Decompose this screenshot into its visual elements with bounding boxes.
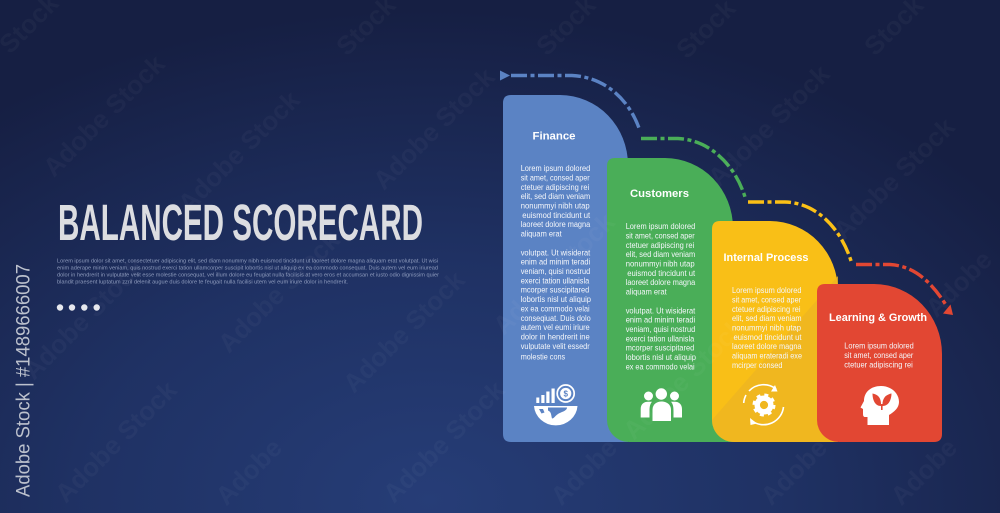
dashed arrow: learning and growth: [856, 264, 953, 315]
customers text: exerci tation ullanisla: [626, 333, 694, 343]
stock id vertical label: Adobe Stock | #1489666007: [14, 264, 34, 497]
dashed arrow: finance: [500, 70, 640, 131]
finance text: mcorper suscipitared: [521, 285, 589, 295]
finance heading: Finance: [532, 130, 576, 142]
stock watermarks: Adobe Stock: [172, 84, 306, 218]
stock watermarks: Adobe: [209, 432, 288, 511]
finance text: sit amet, consed aper: [521, 172, 590, 182]
customers text: ex ea commodo velai: [626, 361, 695, 371]
icon: finance globe with coin and bars: $: [563, 390, 568, 398]
internal process text: elit, sed diam veniam: [732, 313, 802, 323]
finance text: enim ad minim teradi: [521, 257, 590, 267]
customers text: euismod tincidunt ut: [627, 268, 696, 278]
internal process text: aliquam erateradi exe: [732, 350, 802, 360]
customers text: volutpat. Ut wisiderat: [626, 305, 696, 315]
finance text: laoreet dolore magna: [521, 219, 590, 229]
title: BALANCED SCORECARD: [58, 194, 423, 251]
stock watermarks: Adobe: [754, 432, 833, 511]
finance text: exerci tation ullanisla: [521, 275, 589, 285]
intro paragraph: dolor in hendrerit in vulputate velit esse molestie consequat, vel illum dolore eu feugiat nulla facilisis at vero eros et accumsan et iusto odio dignissim quier: [57, 272, 439, 278]
finance text: vulputate velit essedr: [521, 341, 590, 351]
panel: learning and growth: [817, 284, 942, 442]
stock watermarks: Adobe Stock: [702, 58, 836, 192]
customers text: sit amet, consed aper: [626, 230, 695, 240]
internal process text: Lorem ipsum dolored: [732, 285, 802, 295]
learning and growth text: sit amet, consed aper: [844, 350, 913, 360]
stock watermarks: Adobe: [544, 432, 623, 511]
customers text: lobortis nisl ut aliquip: [626, 352, 696, 362]
dashed arrow: customers: [641, 138, 745, 197]
finance card: [503, 95, 628, 442]
finance text: nonummyi nibh utap: [521, 200, 590, 210]
intro paragraph: enim aderape minim veniam, quis nostrud exerci tation ullamcorper suscipit lobortis nisl ut aliquip ex ea commodo consequat. Duis autem vel eum iriuread: [57, 266, 438, 272]
internal process text: mcirper consed: [732, 360, 783, 370]
customers text: elit, sed diam veniam: [626, 249, 695, 259]
customers text: enim ad minim teradi: [626, 315, 695, 325]
intro paragraph: Lorem ipsum dolor sit amet, consectetuer adipiscing elit, sed diam nonummy nibh euismod tincidunt ut laoreet dolore magna aliquam erat volutpat. Ut wisi: [57, 258, 438, 264]
icon: group of people: [641, 388, 682, 421]
learning and growth heading: Learning & Growth: [829, 312, 927, 324]
learning and growth card: [817, 284, 942, 442]
customers text: [626, 221, 696, 371]
finance text: ex ea commodo velai: [521, 303, 590, 313]
finance text: autem vel eumi iriure: [521, 322, 590, 332]
finance text: lobortis nisl ut aliquip: [521, 294, 591, 304]
internal process text: laoreet dolore magna: [732, 341, 802, 351]
finance text: elit, sed diam veniam: [521, 191, 590, 201]
stock watermarks: Adobe: [884, 432, 963, 511]
internal process shading: [712, 276, 838, 442]
customers text: laoreet dolore magna: [626, 277, 695, 287]
panel: finance: [503, 95, 628, 442]
intro paragraph: [57, 258, 439, 286]
stock watermarks: Adobe Stock: [37, 48, 171, 182]
internal process text: sit amet, consed aper: [732, 294, 801, 304]
icon: gear with rotating arrows: [744, 385, 784, 425]
finance text: conseqiuat. Duis dolo: [521, 313, 591, 323]
learning and growth text: [844, 340, 914, 370]
internal process text: nonummyi nibh utap: [732, 322, 801, 332]
internal process card: [712, 221, 838, 442]
customers text: nonummyi nibh utap: [626, 258, 695, 268]
learning and growth text: ctetuer adipiscing rei: [844, 360, 913, 370]
finance text: volutpat. Ut wisiderat: [521, 247, 591, 257]
stock watermarks: Adobe Stock: [617, 311, 751, 445]
finance text: [521, 163, 591, 362]
customers text: mcorper suscipitared: [626, 343, 694, 353]
customers text: Lorem ipsum dolored: [626, 221, 695, 231]
icon: head with plant: [860, 386, 899, 425]
finance text: dolor in hendrerit ine: [521, 332, 590, 342]
customers card: [607, 158, 733, 442]
stock watermarks: Adobe Stock: [827, 111, 961, 245]
stock watermarks: Adobe Stock: [367, 61, 501, 195]
stock watermarks: Adobe: [919, 244, 998, 323]
stock watermarks: Adobe Stock: [337, 264, 471, 398]
customers text: ctetuer adipiscing rei: [626, 240, 694, 250]
stock watermarks: Adobe Stock: [377, 374, 511, 508]
dashed arrow: internal process: [748, 202, 852, 264]
customers text: veniam, quisi nostrud: [626, 324, 695, 334]
finance text: Lorem ipsum dolored: [521, 163, 590, 173]
learning and growth text: Lorem ipsum dolored: [844, 340, 914, 350]
intro paragraph: blandit praesent luptatum zzril delenit augue duis dolore te feugait nulla facilisi utem vel eum iriure dolor in hendrerit.: [57, 280, 348, 286]
stock watermarks: Adobe Stock: [212, 224, 346, 358]
internal process heading: Internal Process: [724, 252, 808, 264]
internal process text: euismod tincidunt ut: [734, 332, 802, 342]
finance text: molestie cons: [521, 352, 565, 362]
stock watermarks: Adobe Stock: [487, 206, 621, 340]
panel: customers: [607, 158, 733, 442]
finance text: euismod tincidunt ut: [522, 210, 591, 220]
internal process text: ctetuer adipiscing rei: [732, 304, 801, 314]
pagination dots: [57, 304, 100, 311]
finance text: aliquam erat: [521, 228, 562, 238]
panel: internal process: [712, 221, 838, 442]
customers text: aliquam erat: [626, 286, 667, 296]
finance text: veniam, quisi nostrud: [521, 266, 590, 276]
customers heading: Customers: [630, 188, 689, 200]
finance text: ctetuer adipiscing rei: [521, 182, 589, 192]
stock watermarks: Adobe Stock: [17, 251, 151, 385]
icon: finance globe with coin and bars: [534, 385, 578, 425]
stock watermarks: Adobe Stock: [49, 374, 183, 508]
internal process text: [732, 285, 802, 370]
